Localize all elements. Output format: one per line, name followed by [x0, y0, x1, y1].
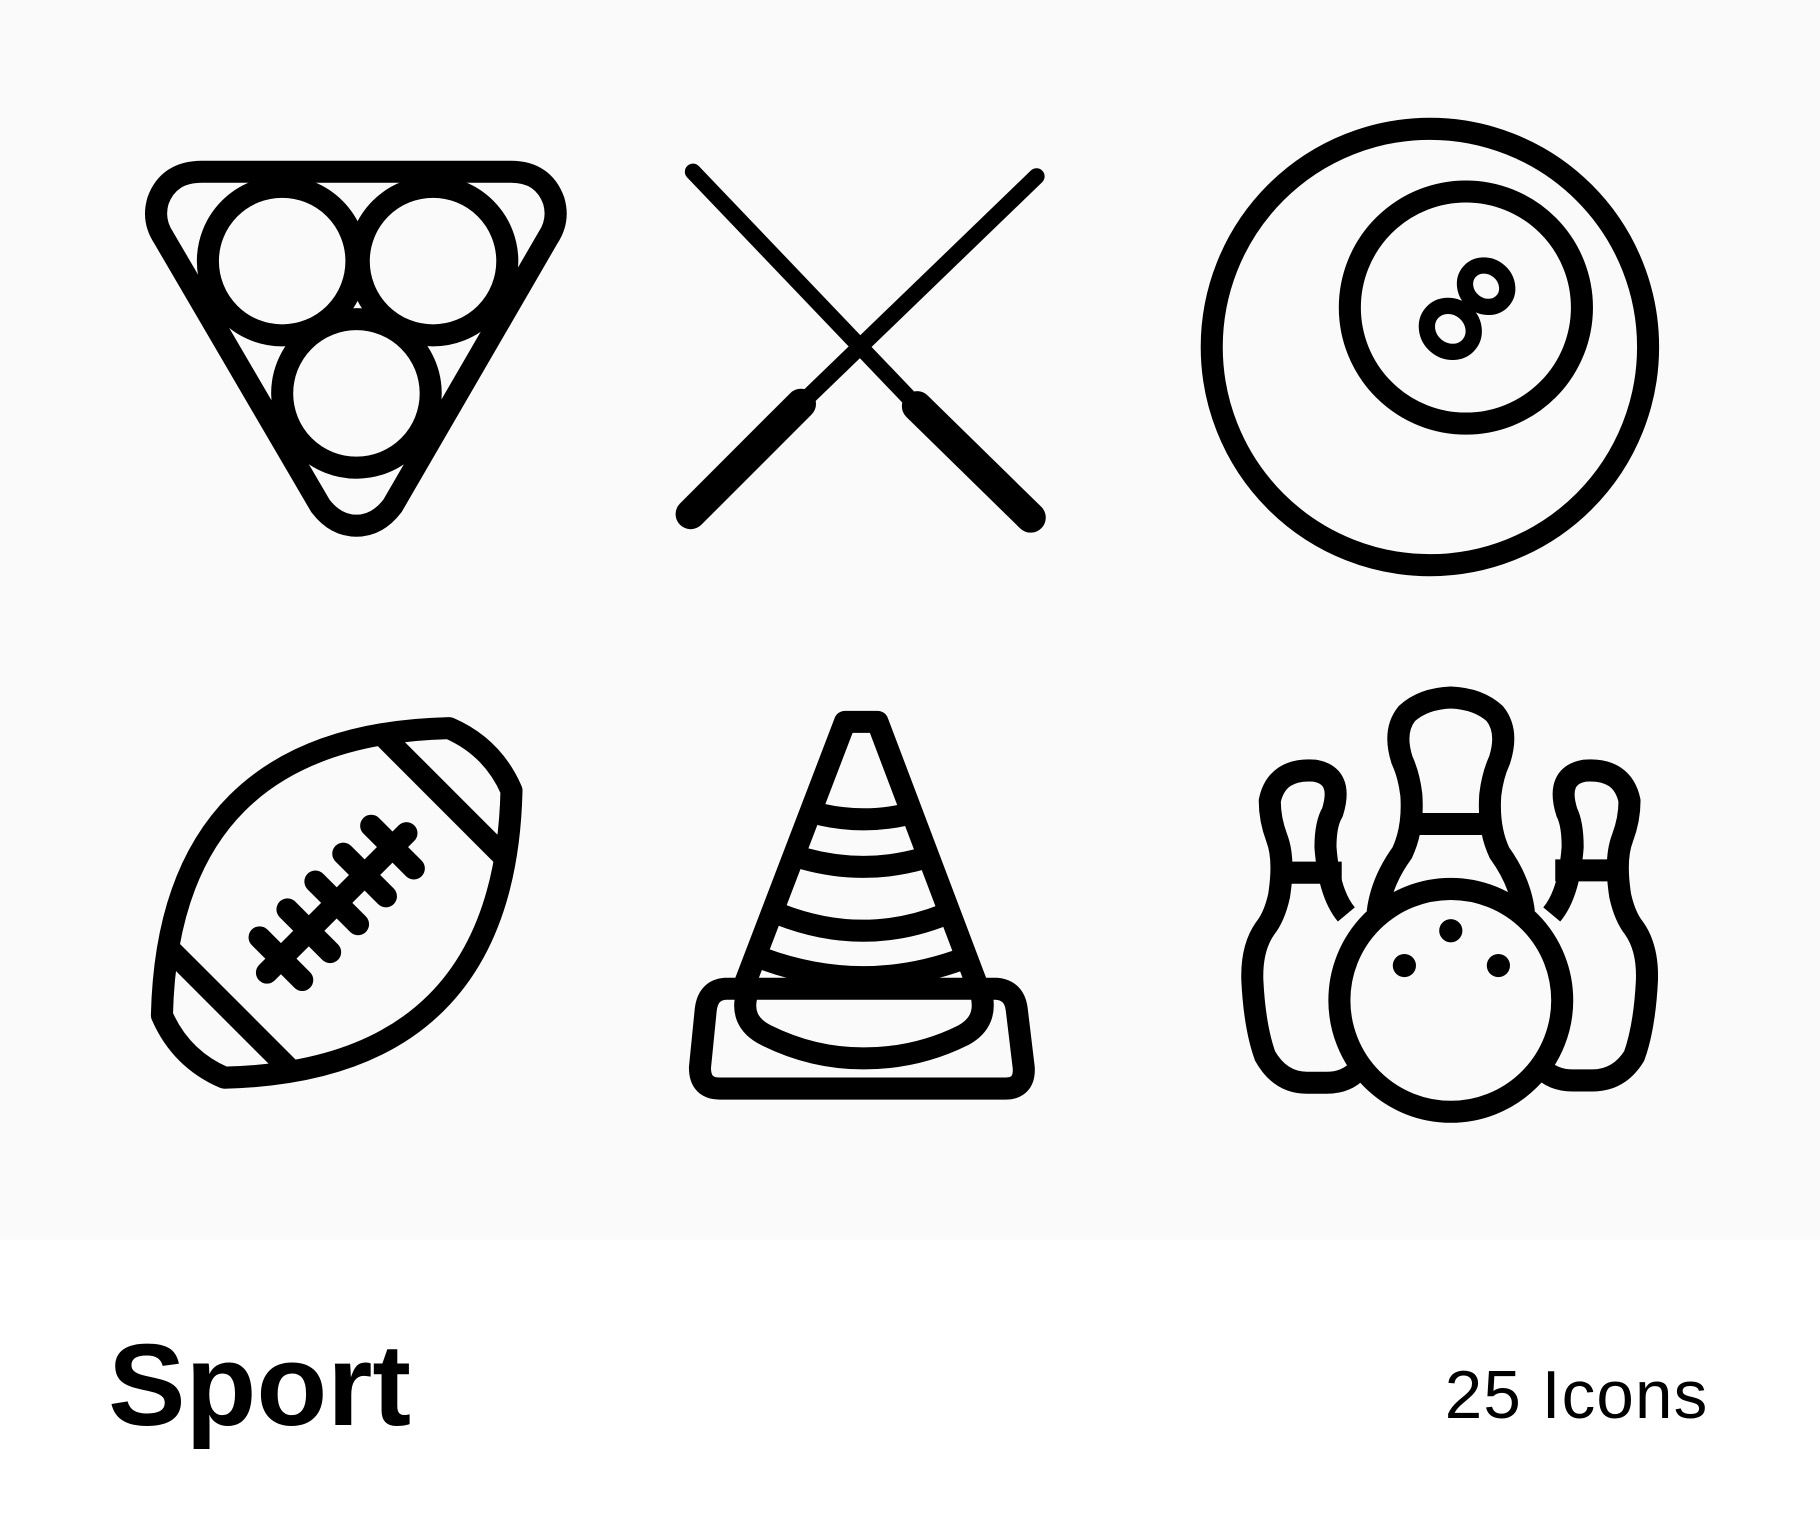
icon: bowling	[1252, 697, 1647, 1112]
icon: american football	[87, 653, 586, 1152]
icon: eight ball	[1212, 129, 1648, 565]
title: Sport	[108, 1320, 411, 1450]
icon: traffic cone	[700, 722, 1024, 1089]
icon: billiard rack	[156, 172, 556, 526]
icon count: 25 Icons	[1445, 1358, 1708, 1433]
icon: crossed cues	[691, 172, 1036, 518]
